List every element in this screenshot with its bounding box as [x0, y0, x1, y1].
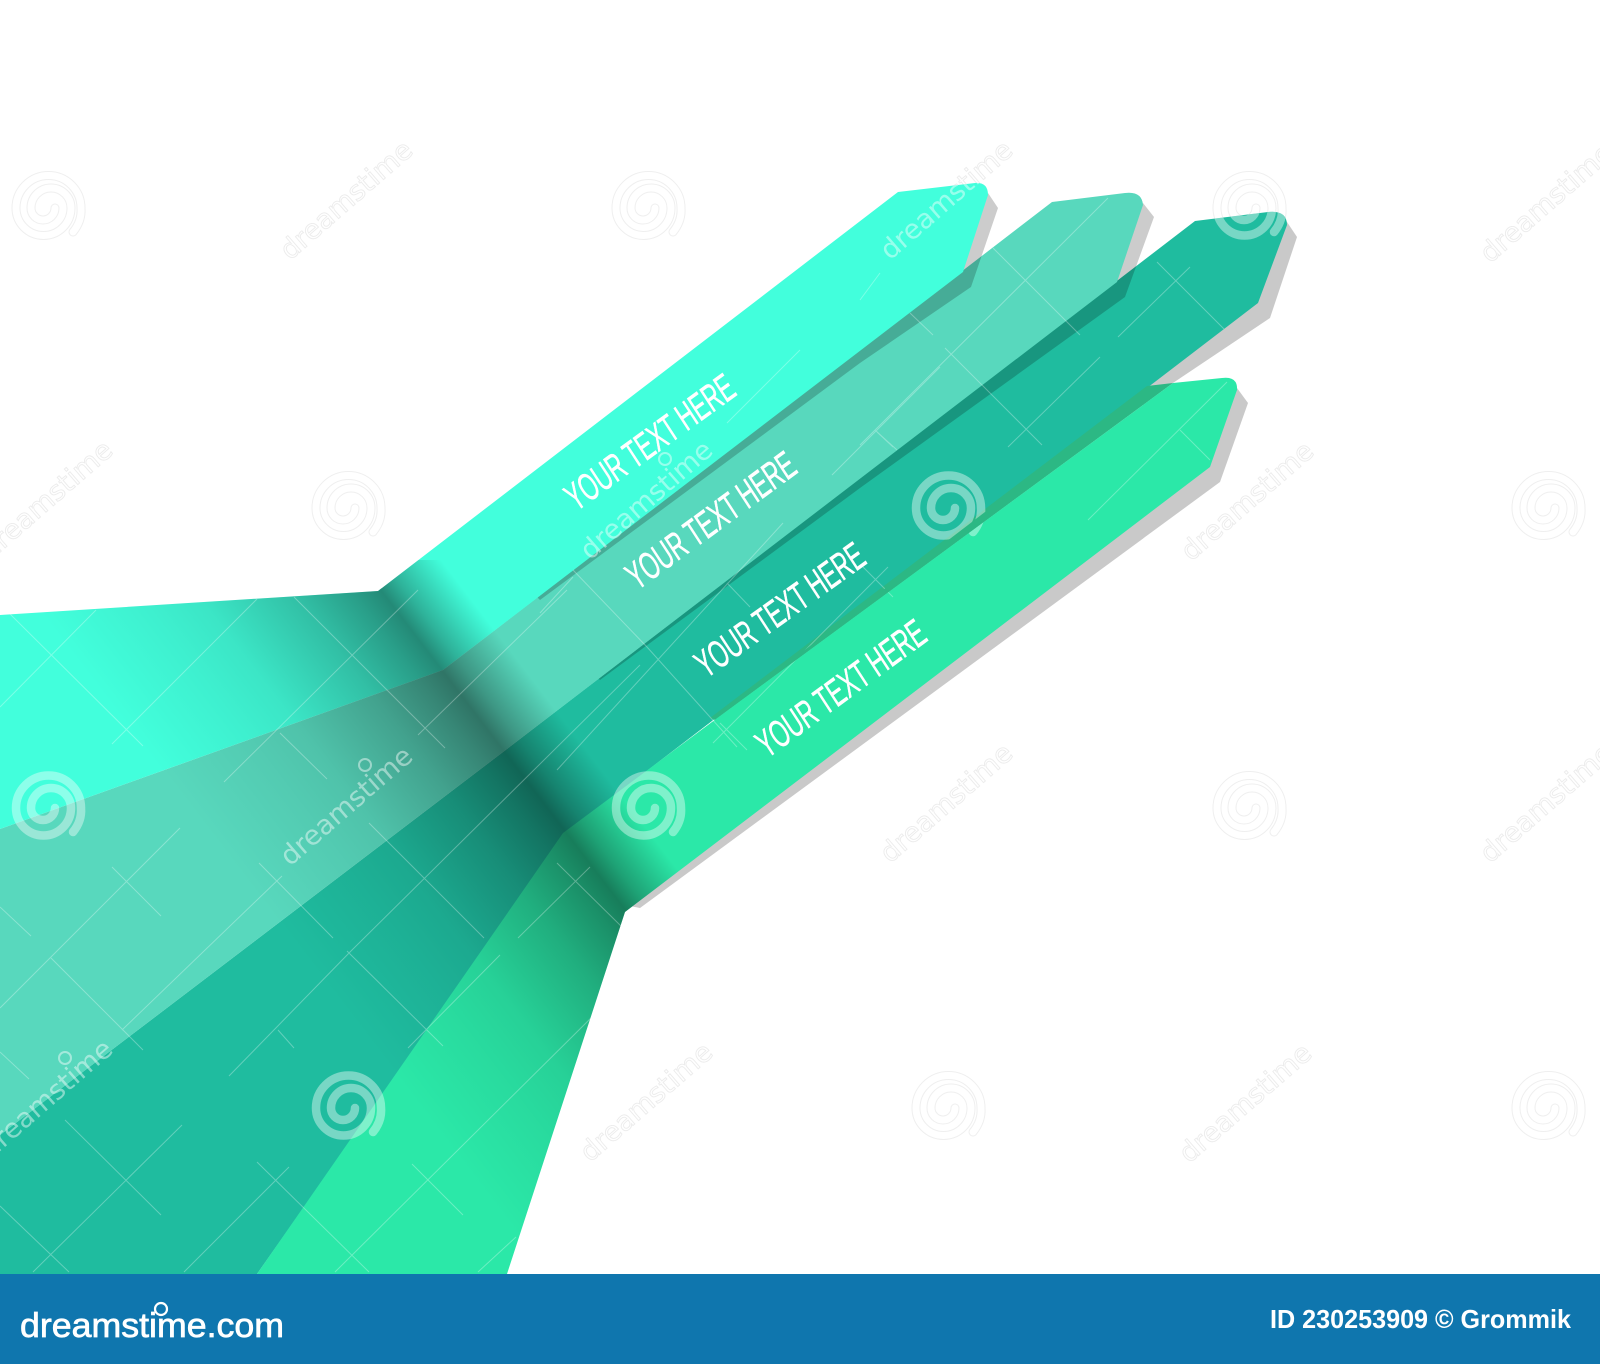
watermark text on white [0, 135, 1600, 1169]
watermark text on white: dreamstime [1173, 1038, 1318, 1169]
watermark text on white: dreamstime [874, 738, 1019, 869]
watermark text on white: dreamstime [1175, 436, 1320, 567]
arrow 4: green [257, 378, 1237, 1274]
arrow 1: aqua [0, 183, 988, 829]
watermark overlay on shapes: dreamstime [874, 135, 1019, 266]
watermark spirals on white [16, 176, 1581, 1135]
arrow labels [557, 365, 934, 766]
arrow 3 drop shadow [1140, 222, 1297, 395]
label: arrow 2: YOUR TEXT HERE [618, 442, 804, 598]
fold shading [100, 560, 674, 1175]
arrow 1 drop shadow [530, 193, 998, 600]
footer image id and credit: ID 230253909 © Grommik [1270, 1304, 1572, 1334]
watermark text on white: dreamstime [274, 135, 419, 266]
arrow 4 drop shadow [625, 388, 1248, 908]
arrow 3: teal [0, 212, 1287, 1274]
watermark overlay on shapes: dreamstime [274, 741, 419, 872]
label: arrow 3: YOUR TEXT HERE [687, 533, 873, 686]
footer logo: dreamstime.com [20, 1307, 284, 1345]
arrow 2: mint [0, 193, 1143, 1135]
label: arrow 1: YOUR TEXT HERE [557, 365, 743, 519]
label: arrow 4: YOUR TEXT HERE [748, 610, 934, 766]
watermark text on white: dreamstime [874, 135, 1019, 266]
watermark overlay on shapes: dreamstime [574, 435, 719, 566]
footer bar [0, 1274, 1600, 1364]
watermark text on white: dreamstime [574, 1037, 719, 1168]
arrow 4 inner edge strip [710, 383, 1173, 720]
watermark overlay on shapes [0, 135, 1282, 1272]
arrow 2 drop shadow [590, 203, 1154, 680]
